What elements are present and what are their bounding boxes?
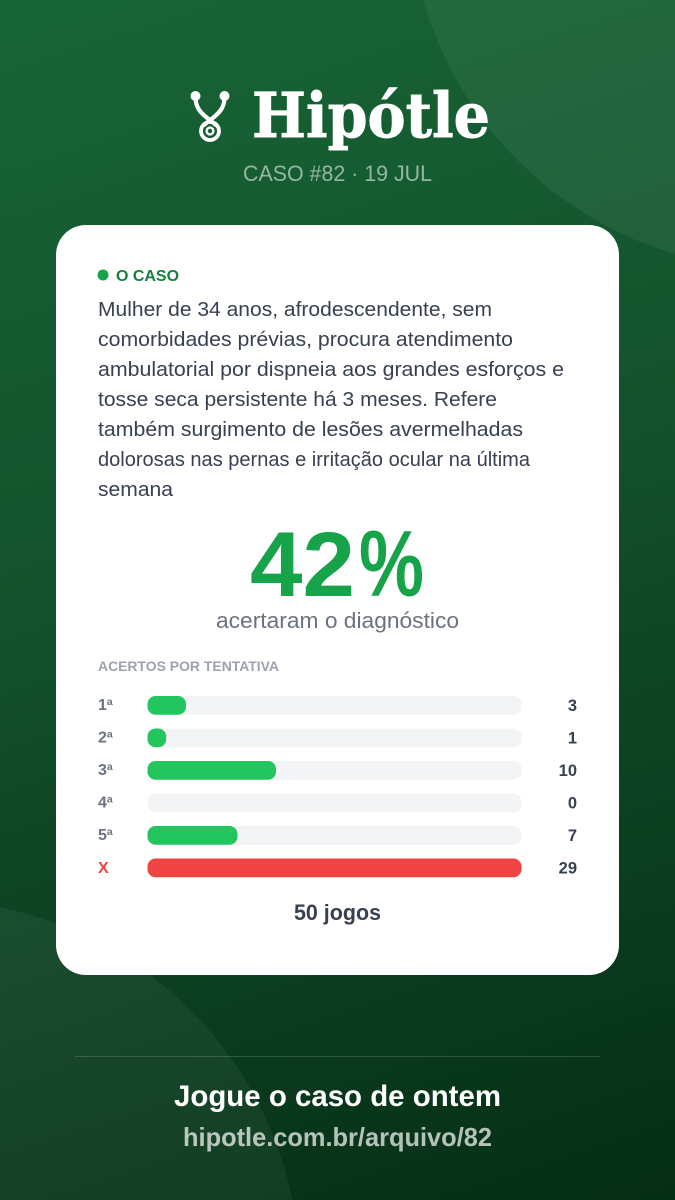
header [190, 79, 490, 186]
row: 4th attempt: 4 [98, 794, 107, 812]
panel: case card [56, 225, 619, 975]
case section heading: O CASO [116, 268, 179, 285]
row: 5th attempt: 7 [568, 827, 577, 845]
big stat: 42%: % [359, 511, 424, 616]
stat caption: acertaram o diagnóstico [216, 608, 459, 633]
row: failed: 29 [559, 860, 577, 878]
row: 3rd attempt: 10 [559, 762, 577, 780]
row: 1st attempt: 3 [568, 697, 577, 715]
row: 1st attempt: a [107, 696, 113, 708]
footer heading: Jogue o caso de ontem [174, 1080, 501, 1113]
footer call to action [174, 1080, 501, 1152]
row: 3rd attempt [98, 761, 577, 780]
row: 4th attempt: 0 [568, 794, 577, 812]
row: 4th attempt: a [107, 794, 113, 806]
case description: também surgimento de lesões avermelhadas [98, 418, 523, 441]
row: 5th attempt: a [107, 826, 113, 838]
row: 1st attempt [98, 696, 577, 715]
footer link: hipotle.com.br/arquivo/82 [183, 1122, 492, 1152]
case description [98, 298, 564, 501]
bar chart: attempts [98, 696, 577, 878]
row: 3rd attempt: a [107, 761, 113, 773]
row: 2nd attempt: 1 [568, 730, 577, 748]
row: 2nd attempt [98, 728, 577, 748]
row: failed: X [98, 860, 109, 877]
case description: comorbidades prévias, procura atendimento [98, 328, 513, 351]
row: 4th attempt [98, 794, 577, 812]
row: failed [98, 858, 577, 878]
case description: tosse seca persistente há 3 meses. Refere [98, 388, 497, 411]
case description: semana [98, 478, 174, 501]
case number and date: CASO #82 · 19 JUL [243, 161, 432, 186]
row: 2nd attempt: 2 [98, 730, 107, 746]
case description: dolorosas nas pernas e irritação ocular na última [98, 448, 531, 471]
icon: stethoscope [190, 91, 230, 140]
row: 2nd attempt: a [107, 728, 113, 740]
case description: ambulatorial por dispneia aos grandes esforços e [98, 358, 564, 381]
row: 5th attempt [98, 826, 577, 845]
case description: Mulher de 34 anos, afrodescendente, sem [98, 298, 492, 321]
big stat: 42% [250, 511, 424, 616]
big stat: 42%: 42 [250, 514, 355, 616]
row: 1st attempt: 1 [98, 697, 107, 714]
chart heading: ACERTOS POR TENTATIVA [98, 658, 279, 674]
row: 3rd attempt: 3 [98, 762, 107, 779]
row: 5th attempt: 5 [98, 827, 107, 844]
title: Hipótle [252, 79, 490, 152]
total games: 50 jogos [294, 900, 381, 925]
